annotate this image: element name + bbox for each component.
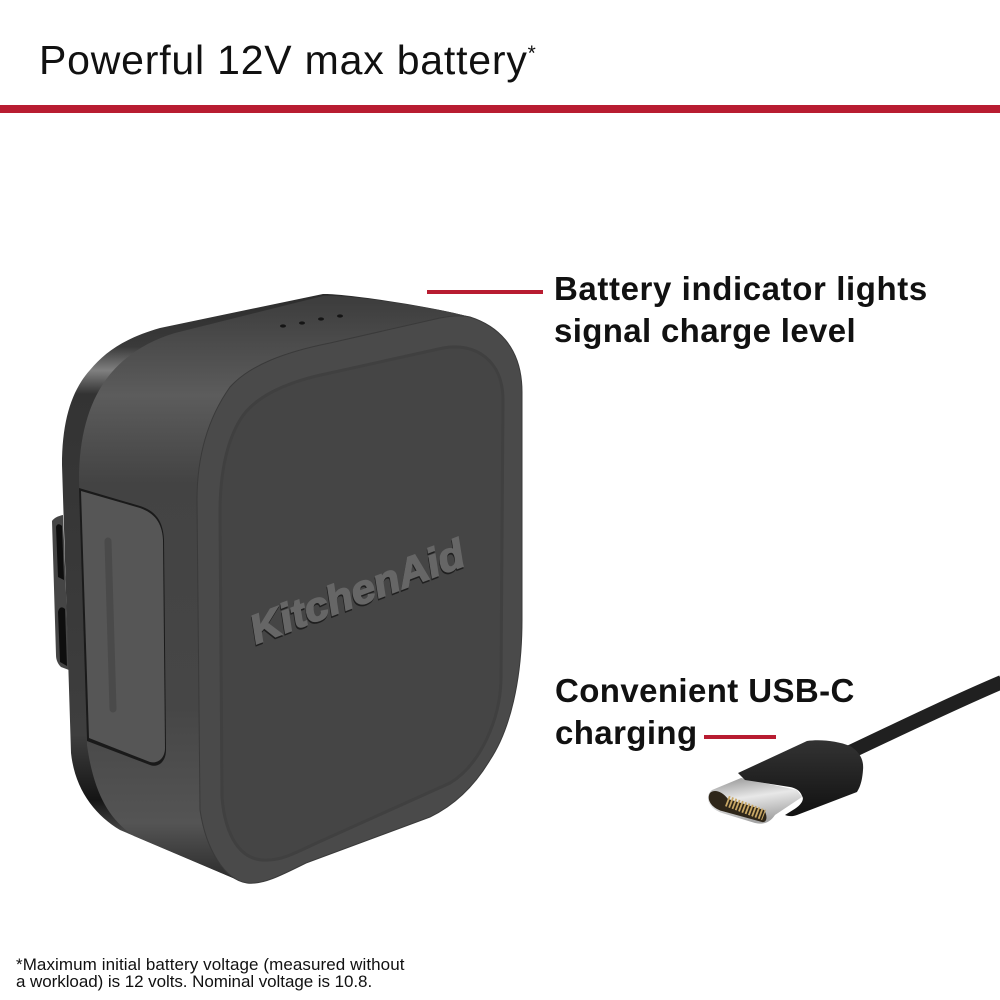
callout text: signal charge level xyxy=(554,312,856,349)
callout text: Battery indicator lights xyxy=(554,270,928,307)
connector black housing xyxy=(738,740,863,816)
callout text xyxy=(554,270,928,349)
USB-C cable xyxy=(708,682,1000,824)
callout text: Convenient USB-C xyxy=(555,672,855,709)
KitchenAid logo: KitchenAid xyxy=(244,531,472,652)
battery pack xyxy=(52,294,522,883)
connector metal shell xyxy=(708,778,802,824)
indicator light dots xyxy=(280,314,343,328)
footnote xyxy=(16,955,405,991)
recessed panel xyxy=(220,347,503,860)
connector pins xyxy=(727,801,764,815)
door grip groove xyxy=(108,541,113,709)
callout text: charging xyxy=(555,714,698,751)
red header rule xyxy=(0,105,1000,113)
KitchenAid logo: KitchenAid xyxy=(243,533,472,654)
leader line xyxy=(704,735,776,739)
title: Powerful 12V max battery* xyxy=(39,37,536,83)
footnote: a workload) is 12 volts. Nominal voltage is 10.8. xyxy=(16,972,372,991)
leader line xyxy=(427,290,543,294)
callout: USB-C charging xyxy=(555,672,855,751)
connector opening xyxy=(709,791,766,822)
side clip xyxy=(52,515,69,670)
battery door xyxy=(79,488,166,766)
front face rim xyxy=(197,316,522,883)
side and top body xyxy=(79,296,522,882)
footnote: *Maximum initial battery voltage (measured without xyxy=(16,955,405,974)
callout text xyxy=(555,672,855,751)
callout: battery indicator lights xyxy=(427,270,928,349)
rear rim silhouette xyxy=(62,294,522,882)
cable cord xyxy=(848,682,1000,753)
